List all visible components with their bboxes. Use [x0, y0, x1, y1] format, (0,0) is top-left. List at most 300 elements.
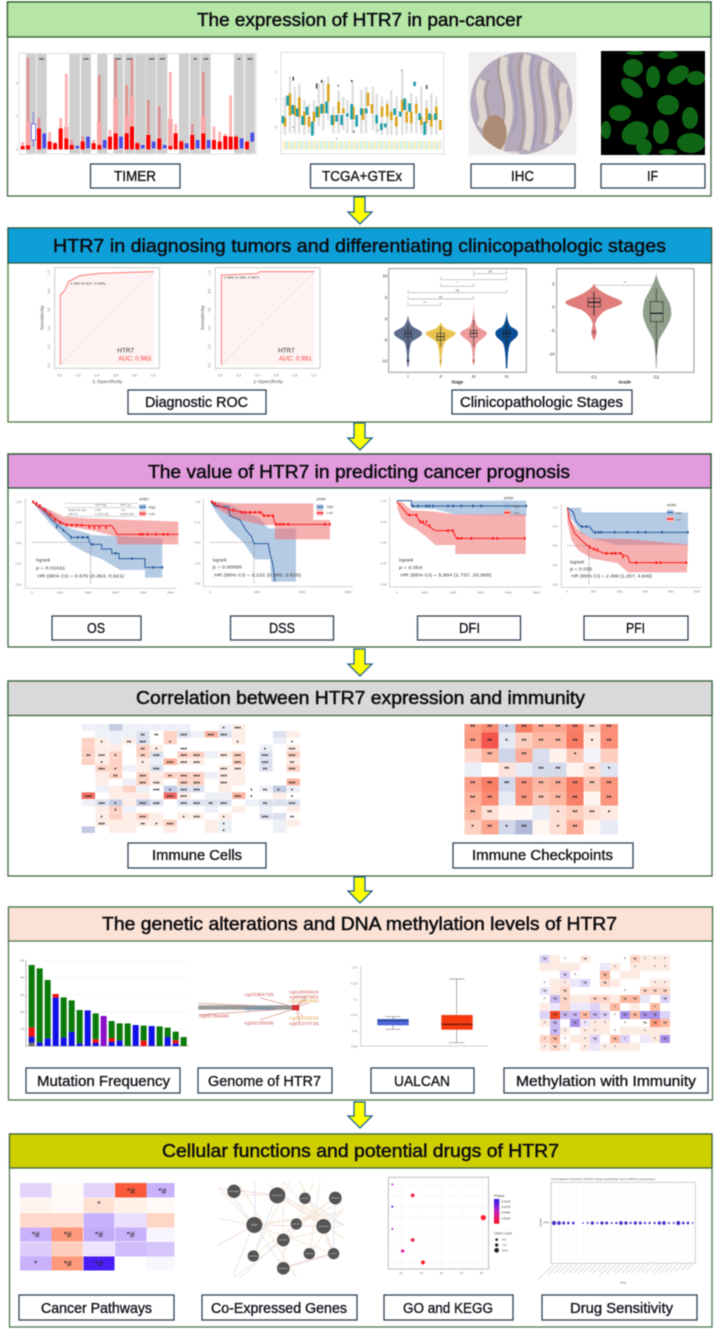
- chart: methylation immunity heatmap: *: [624, 957, 626, 961]
- chart: methylation immunity heatmap: *#: [633, 997, 637, 1001]
- chart: PFI survival curve: 1000: [590, 590, 597, 594]
- label: Cancer Pathways: [19, 1295, 174, 1320]
- label: Genome of HTR7: [198, 1068, 332, 1093]
- chart: DFI survival curve: 0: [396, 590, 398, 594]
- chart: OS survival curve: 0.50: [16, 541, 22, 545]
- chart: DSS survival curve: HR (95% CI) = 0.231 (0.085, 0.625): [214, 573, 302, 578]
- chart: immune cell heatmap: *: [264, 747, 267, 753]
- chart: immune checkpoint heatmap: **: [539, 724, 544, 731]
- chart: DSS survival curve: 0.75: [195, 521, 201, 525]
- chart: immune cell heatmap: ***: [139, 781, 147, 787]
- chart: methylation immunity heatmap: *#: [663, 997, 667, 1001]
- chart: OS survival curve: 1.00: [16, 500, 22, 504]
- chart: violin plot by stage: -10: [381, 359, 388, 364]
- chart: methylation immunity heatmap: *: [604, 1045, 606, 1049]
- chart: DFI survival curve: logrank: [399, 558, 414, 563]
- chart: immune cell heatmap: ***: [153, 802, 160, 808]
- chart: immune cell heatmap: ***: [180, 781, 188, 787]
- chart: genome of HTR7 methylation probes: cg15364725: [244, 992, 274, 998]
- chart: immune cell heatmap: ***: [193, 775, 201, 781]
- chart: drug sensitivity dot plot: HTR7: [543, 1223, 550, 1225]
- chart: DFI survival curve: 0.75: [381, 520, 387, 524]
- chart: OS survival curve: 0.25: [16, 562, 22, 566]
- chart: immune checkpoint heatmap: **: [470, 809, 476, 816]
- panel frame: [10, 1134, 712, 1327]
- chart: violin plot by stage: IV: [505, 374, 509, 379]
- chart: immune checkpoint heatmap: **: [607, 724, 612, 731]
- chart: immune cell heatmap: ***: [262, 761, 269, 767]
- chart: GO and KEGG dot plot: 40: [440, 1271, 443, 1275]
- chart: immune cell heatmap: ***: [98, 802, 106, 808]
- label: Methylation with Immunity: [504, 1068, 708, 1093]
- chart: genome of HTR7 methylation probes: cg12653555: [289, 998, 319, 1004]
- chart: PFI survival curve: Low: [676, 517, 682, 521]
- chart: methylation immunity heatmap: *#: [593, 997, 597, 1001]
- chart: PFI survival curve: 2000: [617, 590, 623, 594]
- heading: The genetic alterations and DNA methylation levels of HTR7: [102, 913, 617, 934]
- chart: immune cell heatmap: *: [291, 740, 294, 746]
- label: DSS: [230, 616, 334, 640]
- chart: ROC curve AUC 0.963: HTR7: [117, 348, 135, 354]
- chart: immune checkpoint heatmap: **: [522, 752, 527, 759]
- chart: immune cell heatmap: ***: [220, 754, 228, 760]
- chart: GO and KEGG dot plot: Gene Count: [494, 1232, 512, 1236]
- chart: ROC curve AUC 0.963: 1-Specificity: [92, 379, 123, 384]
- chart: immune checkpoint heatmap: **: [487, 824, 493, 831]
- chart: immune cell heatmap: ***: [180, 754, 188, 760]
- chart: GO and KEGG dot plot: 5.0: [502, 1238, 506, 1242]
- chart: mutation frequency bars: 5%: [20, 959, 25, 963]
- chart: immune checkpoint heatmap: **: [487, 781, 493, 788]
- chart: immune checkpoint heatmap: **: [487, 724, 493, 731]
- chart: methylation immunity heatmap: *#: [663, 1037, 667, 1041]
- label: Immune Cells: [128, 843, 266, 868]
- chart: immune checkpoint heatmap: **: [556, 781, 561, 788]
- chart: methylation immunity heatmap: *#: [553, 1045, 557, 1049]
- chart: DFI survival curve: 1.00: [381, 499, 387, 503]
- chart: immune cell heatmap: *: [237, 740, 240, 746]
- chart: methylation immunity heatmap: *: [574, 973, 576, 977]
- chart: ROC curve AUC 0.991: 0.0: [218, 374, 223, 378]
- chart: immune cell heatmap: ***: [153, 788, 160, 794]
- chart: TIMER box plot: 4: [16, 82, 18, 86]
- chart: methylation immunity heatmap: *: [624, 989, 626, 993]
- chart: OS survival curve: Low: [148, 512, 155, 516]
- chart: ROC curve AUC 0.963: 0.8: [132, 374, 137, 378]
- chart: PFI survival curve: 5000: [694, 590, 700, 594]
- chart: violin plot by grade: 5: [552, 281, 555, 286]
- panel frame: [8, 454, 711, 647]
- chart: ROC curve AUC 0.963: 0.4: [95, 374, 99, 378]
- chart: violin plot by stage: [381, 269, 526, 384]
- label: Drug Sensitivity: Drug Sensitivity: [570, 1301, 674, 1317]
- chart: ROC curve AUC 0.991: 0.4: [208, 326, 212, 331]
- heading: The expression of HTR7 in pan-cancer: [197, 9, 522, 30]
- chart: co-expression gene network: [218, 1182, 343, 1278]
- chart: OS survival curve: 0.75: [16, 521, 22, 525]
- chart: ROC curve AUC 0.991: 0.2: [208, 345, 212, 349]
- chart: ROC curve AUC 0.991: 1-Specificity: [253, 379, 284, 384]
- label: DSS: DSS: [269, 621, 295, 637]
- chart: methylation immunity heatmap: *#: [603, 981, 607, 985]
- chart: GO and KEGG dot plot: 60: [480, 1271, 484, 1275]
- chart: ROC curve AUC 0.991: -1.806 (1.000, 0.967): [223, 276, 259, 280]
- label: Mutation Frequency: [26, 1068, 180, 1093]
- heading: Cellular functions and potential drugs of HTR7: [162, 1140, 559, 1161]
- chart: OS survival curve: NA: [122, 509, 125, 512]
- chart: DFI survival curve: HTR7: [504, 496, 514, 500]
- chart: ROC curve AUC 0.963: [39, 268, 159, 384]
- chart: immune cell heatmap: ***: [220, 734, 228, 740]
- chart: immune cell heatmap: **: [263, 802, 268, 808]
- chart: DSS survival curve: logrank: [213, 557, 228, 562]
- image: IHC tissue core: [469, 52, 576, 157]
- chart: violin plot by grade: G1: [591, 374, 597, 379]
- chart: immune cell heatmap: ***: [167, 822, 174, 828]
- chart: TIMER box plot: ***: [39, 57, 44, 62]
- panel header band: [8, 681, 712, 716]
- chart: PFI survival curve: logrank: [570, 559, 585, 564]
- chart: ROC curve AUC 0.991: AUC: 0.991: [279, 356, 312, 362]
- chart: PFI survival curve: 0.75: [552, 525, 558, 529]
- chart: TIMER box plot: ***: [127, 57, 132, 62]
- chart: immune cell heatmap: ***: [193, 802, 201, 808]
- chart: immune checkpoint heatmap: **: [470, 724, 476, 731]
- chart: immune checkpoint heatmap: **: [487, 738, 493, 745]
- chart: immune checkpoint heatmap: **: [573, 795, 578, 802]
- chart: DSS survival curve: Low: [327, 511, 333, 515]
- chart: violin plot by grade: -5: [551, 328, 555, 333]
- chart: DFI survival curve: p = 0.054: [399, 565, 423, 570]
- chart: immune cell heatmap: *: [250, 795, 253, 801]
- chart: immune cell heatmap: ***: [180, 795, 188, 801]
- chart: immune cell heatmap: ***: [289, 754, 296, 760]
- chart: methylation immunity heatmap: *#: [653, 1013, 657, 1017]
- chart: ROC curve AUC 0.963: 0.0: [47, 363, 51, 368]
- chart: immune cell heatmap: *: [155, 822, 158, 828]
- chart: ROC curve AUC 0.963: -2.280 (0.927, 0.899): [69, 282, 106, 286]
- chart: methylation immunity heatmap: *: [604, 1021, 606, 1025]
- chart: DFI survival curve: 3000: [477, 590, 484, 594]
- label: TCGA+GTEx: TCGA+GTEx: [322, 169, 403, 185]
- chart: methylation immunity heatmap: *: [564, 1037, 566, 1041]
- chart: violin plot by stage: *: [457, 281, 459, 285]
- chart: methylation immunity heatmap: *: [614, 1013, 616, 1017]
- chart: methylation immunity heatmap: *: [564, 1029, 566, 1033]
- panel header band: [10, 1134, 712, 1168]
- chart: methylation immunity heatmap: *: [544, 997, 546, 1001]
- chart: immune checkpoint heatmap: **: [470, 738, 476, 745]
- chart: immune cell heatmap: ***: [193, 754, 201, 760]
- chart: OS survival curve: 2000: [85, 591, 92, 595]
- chart: immune cell heatmap: ***: [180, 747, 188, 753]
- chart: immune checkpoint heatmap: **: [539, 766, 544, 773]
- chart: ROC curve AUC 0.963: 0.0: [57, 374, 62, 378]
- chart: methylation immunity heatmap: *: [644, 957, 646, 961]
- chart: PFI survival curve: HTR7: [667, 503, 677, 507]
- chart: GO and KEGG dot plot: PValue: [494, 1194, 505, 1198]
- chart: methylation immunity heatmap: *#: [573, 1013, 577, 1017]
- arrow: prognosis to immunity: [348, 649, 372, 676]
- chart: immune cell heatmap: ***: [153, 768, 160, 774]
- chart: violin plot by stage: 0: [385, 316, 388, 321]
- chart: immune checkpoint heatmap: **: [522, 724, 527, 731]
- chart: immune checkpoint heatmap: **: [470, 781, 476, 788]
- chart: ROC curve AUC 0.963: 0.6: [47, 308, 51, 312]
- chart: ROC curve AUC 0.963: 0.8: [47, 289, 51, 294]
- chart: immune cell heatmap: ***: [193, 781, 201, 787]
- chart: methylation immunity heatmap: *#: [633, 957, 637, 961]
- chart: immune checkpoint heatmap: **: [487, 752, 493, 759]
- arrow: immunity to genetic alterations: [348, 877, 372, 903]
- chart: OS survival curve: HTR7: [139, 497, 149, 501]
- chart: immune checkpoint heatmap: **: [573, 824, 578, 831]
- chart: immune checkpoint heatmap: **: [504, 781, 510, 788]
- panel header band: [8, 907, 712, 941]
- chart: violin plot by grade: G2: [653, 374, 660, 379]
- chart: violin plot by grade: [548, 269, 694, 385]
- chart: methylation immunity heatmap: *#: [653, 1021, 657, 1025]
- label: IF: [601, 164, 705, 188]
- chart: immune cell heatmap: ***: [139, 775, 147, 781]
- chart: methylation immunity heatmap: *#: [553, 1029, 557, 1033]
- label: Drug Sensitivity: [542, 1295, 697, 1320]
- chart: mutation frequency bars: 4%: [20, 976, 25, 980]
- chart: OS survival curve: 0: [31, 591, 33, 595]
- label: Co-Expressed Genes: [202, 1295, 357, 1320]
- chart: ROC curve AUC 0.963: 0.4: [47, 326, 51, 331]
- chart: DFI survival curve: Low: [513, 511, 520, 515]
- chart: immune cell heatmap: ***: [220, 781, 228, 787]
- chart: ROC curve AUC 0.963: 1.0: [151, 374, 155, 378]
- chart: immune cell heatmap: **: [140, 754, 146, 760]
- label: Immune Checkpoints: [453, 843, 633, 868]
- chart: immune checkpoint heatmap: **: [539, 795, 544, 802]
- chart: OS survival curve: 2,093: [95, 510, 102, 512]
- chart: violin plot by stage: III: [472, 374, 475, 379]
- chart: TCGA+GTEx box plot: 0: [275, 125, 277, 129]
- chart: TIMER box plot: ***: [160, 57, 165, 62]
- chart: methylation immunity heatmap: *#: [553, 1013, 557, 1017]
- chart: immune cell heatmap: ***: [193, 788, 201, 794]
- label: UALCAN: [371, 1068, 474, 1093]
- panel frame: [8, 228, 712, 422]
- chart: OS survival curve: logrank: [36, 558, 51, 563]
- chart: violin plot by stage: ns: [456, 288, 459, 292]
- chart: immune cell heatmap: *: [223, 822, 226, 828]
- chart: ROC curve AUC 0.963: 1.0: [47, 270, 51, 275]
- chart: immune checkpoint heatmap: **: [573, 738, 578, 745]
- panel frame: [8, 907, 712, 1100]
- chart: immune checkpoint heatmap: **: [487, 795, 493, 802]
- chart: immune checkpoint heatmap: **: [590, 781, 595, 788]
- chart: methylation immunity heatmap: *: [564, 957, 566, 961]
- chart: immune cell heatmap: **: [140, 734, 146, 740]
- chart: immune cell heatmap: ***: [234, 761, 242, 767]
- label: Immune Checkpoints: Immune Checkpoints: [472, 848, 613, 864]
- chart: DFI survival curve: 4000: [505, 590, 512, 594]
- chart: ROC curve AUC 0.963: 0.2: [47, 345, 51, 349]
- chart: immune checkpoint heatmap: *: [608, 809, 611, 816]
- chart: methylation immunity heatmap: *#: [613, 1037, 617, 1041]
- chart: PFI survival curve: 3000: [642, 590, 649, 594]
- chart: violin plot by grade: 0: [552, 305, 555, 310]
- label: IHC: [471, 164, 575, 188]
- chart: drug sensitivity dot plot: [538, 1177, 695, 1285]
- chart: immune cell heatmap: ***: [289, 768, 296, 774]
- chart: DSS survival curve: 0: [210, 590, 212, 594]
- chart: immune checkpoint heatmap: *: [608, 766, 611, 773]
- chart: DFI survival curve: [381, 496, 541, 594]
- chart: methylation immunity heatmap: *: [624, 1021, 626, 1025]
- chart: violin plot by stage: ns: [489, 269, 492, 273]
- chart: immune checkpoint heatmap: **: [470, 795, 476, 802]
- chart: immune cell heatmap: **: [168, 775, 173, 781]
- heading: HTR7 in diagnosing tumors and differentiating clinicopathologic stages: [53, 235, 666, 256]
- chart: immune checkpoint heatmap: *: [574, 752, 577, 759]
- label: Diagnostic ROC: [128, 390, 266, 414]
- chart: immune checkpoint heatmap: **: [522, 824, 527, 831]
- heading: Correlation between HTR7 expression and immunity: [136, 687, 586, 708]
- chart: UALCAN box plot: 0.075: [351, 1013, 358, 1017]
- chart: immune checkpoint heatmap: **: [607, 781, 612, 788]
- chart: methylation immunity heatmap: *#: [603, 973, 607, 977]
- chart: immune cell heatmap: ***: [85, 795, 92, 801]
- chart: immune checkpoint heatmap: *: [557, 824, 560, 831]
- panel header band: [8, 2, 711, 37]
- chart: immune checkpoint heatmap: *: [505, 738, 508, 745]
- chart: immune checkpoint heatmap: **: [556, 738, 561, 745]
- chart: ROC curve AUC 0.991: [200, 268, 320, 384]
- label: IF: IF: [647, 169, 658, 185]
- chart: immune checkpoint heatmap: **: [590, 809, 595, 816]
- chart: DSS survival curve: 1000: [253, 590, 260, 594]
- chart: immune cell heatmap: ***: [180, 775, 188, 781]
- chart: TIMER box plot: ***: [83, 57, 89, 62]
- chart: ROC curve AUC 0.991: 1.0: [311, 374, 316, 378]
- chart: immune cell heatmap: *: [155, 747, 158, 753]
- chart: immune cell heatmap: **: [154, 734, 159, 740]
- chart: immune cell heatmap: [82, 727, 300, 835]
- chart: immune cell heatmap: **: [140, 747, 146, 753]
- chart: methylation immunity heatmap: *: [614, 1029, 616, 1033]
- chart: immune cell heatmap: ***: [234, 795, 242, 801]
- chart: immune cell heatmap: *: [250, 788, 253, 794]
- chart: immune cell heatmap: *: [169, 740, 172, 746]
- chart: ROC curve AUC 0.991: Sensitivity: [200, 305, 205, 330]
- chart: methylation immunity heatmap: *: [584, 1029, 586, 1033]
- chart: immune checkpoint heatmap: *: [505, 724, 508, 731]
- chart: violin plot by grade: Grade: [618, 380, 631, 385]
- chart: co-expression gene network: HTR7: [251, 1223, 258, 1227]
- chart: DFI survival curve: 2000: [450, 590, 457, 594]
- chart: immune checkpoint heatmap: **: [487, 809, 493, 816]
- chart: violin plot by stage: Stage: [451, 379, 464, 384]
- chart: immune cell heatmap: *: [142, 761, 145, 767]
- chart: PFI survival curve: [552, 503, 701, 594]
- chart: OS survival curve: 1000: [57, 591, 64, 595]
- chart: DFI survival curve: HR (95% CI) = 5.904 (1.737, 20.069): [401, 573, 492, 578]
- chart: TCGA+GTEx box plot: [275, 52, 444, 154]
- chart: cancer pathways heatmap: *#: [158, 1186, 167, 1196]
- chart: immune checkpoint heatmap: **: [590, 766, 595, 773]
- chart: TCGA+GTEx box plot: 2: [275, 70, 277, 74]
- chart: immune cell heatmap: **: [290, 761, 295, 767]
- chart: immune checkpoint heatmap: **: [539, 781, 544, 788]
- chart: violin plot by grade: **: [624, 281, 627, 285]
- arrow: pan-cancer to diagnosis: [348, 197, 372, 224]
- chart: cancer pathways heatmap: *: [34, 1259, 38, 1269]
- chart: immune cell heatmap: *: [291, 795, 294, 801]
- chart: ROC curve AUC 0.963: 0.6: [113, 374, 118, 378]
- chart: violin plot by stage: *: [473, 275, 475, 279]
- chart: immune cell heatmap: ***: [289, 747, 296, 753]
- arrow: diagnosis to prognosis: [348, 423, 372, 450]
- chart: immune cell heatmap: *: [101, 816, 104, 822]
- label: IHC: IHC: [511, 169, 534, 185]
- chart: ROC curve AUC 0.991: 0.6: [274, 374, 279, 378]
- chart: violin plot by grade: -10: [548, 351, 555, 356]
- chart: immune checkpoint heatmap: **: [539, 738, 544, 745]
- chart: immune checkpoint heatmap: **: [590, 724, 595, 731]
- chart: GO and KEGG dot plot: 0.0050: [501, 1210, 511, 1214]
- chart: GO and KEGG dot plot: 0.0100: [501, 1200, 511, 1204]
- chart: OS survival curve: Median OS, days: [68, 510, 87, 512]
- chart: violin plot by stage: 5: [385, 295, 388, 300]
- chart: immune cell heatmap: ***: [289, 802, 296, 808]
- chart: immune cell heatmap: ***: [153, 781, 160, 787]
- chart: immune cell heatmap: ***: [193, 816, 201, 822]
- panel: cellular functions and drugs: [10, 1134, 712, 1327]
- chart: TIMER box plot: ***: [247, 57, 253, 62]
- chart: immune cell heatmap: *: [223, 816, 226, 822]
- panel header band: [8, 454, 711, 488]
- chart: methylation immunity heatmap: *#: [653, 989, 657, 993]
- chart: PFI survival curve: HR (95% CI) = 2.469 (1.257, 4.849): [571, 574, 653, 579]
- chart: immune cell heatmap: ***: [139, 802, 147, 808]
- chart: immune cell heatmap: ***: [193, 761, 201, 767]
- chart: methylation immunity heatmap: *#: [563, 973, 567, 977]
- chart: methylation immunity heatmap: *#: [563, 997, 567, 1001]
- chart: immune cell heatmap: ***: [139, 816, 147, 822]
- chart: methylation immunity heatmap: *: [564, 981, 566, 985]
- chart: GO and KEGG dot plot: 0.0075: [501, 1205, 511, 1209]
- chart: mutation frequency bars: [20, 959, 189, 1046]
- arrow: genetic alterations to cellular functions: [348, 1102, 372, 1128]
- chart: cancer pathways heatmap: *#: [127, 1230, 135, 1240]
- panel frame: [8, 681, 712, 876]
- chart: cancer pathways heatmap: *#: [64, 1230, 72, 1240]
- label: Mutation Frequency: Mutation Frequency: [37, 1074, 171, 1090]
- chart: ROC curve AUC 0.991: 0.8: [293, 374, 297, 378]
- chart: immune checkpoint heatmap: *: [591, 738, 594, 745]
- chart: OS survival curve: [16, 497, 178, 595]
- chart: methylation immunity heatmap: *: [544, 1045, 546, 1049]
- chart: immune cell heatmap: *: [223, 829, 226, 835]
- chart: methylation immunity heatmap: *#: [623, 1013, 627, 1017]
- chart: ROC curve AUC 0.991: 0.6: [208, 308, 212, 312]
- panel header band: [8, 228, 712, 263]
- chart: drug sensitivity dot plot: Correlation between GDSC drug sensitivity and mRNA expression: [551, 1177, 656, 1181]
- chart: methylation immunity heatmap: *: [644, 1029, 646, 1033]
- chart: PFI survival curve: p = 0.035: [570, 566, 593, 571]
- chart: violin plot by stage: -5: [383, 338, 388, 343]
- chart: cancer pathways heatmap: *: [97, 1199, 101, 1209]
- chart: immune checkpoint heatmap: *: [557, 809, 560, 816]
- chart: DFI survival curve: 0.50: [381, 540, 387, 544]
- chart: immune cell heatmap: *: [114, 802, 117, 808]
- chart: methylation immunity heatmap: *: [584, 1037, 586, 1041]
